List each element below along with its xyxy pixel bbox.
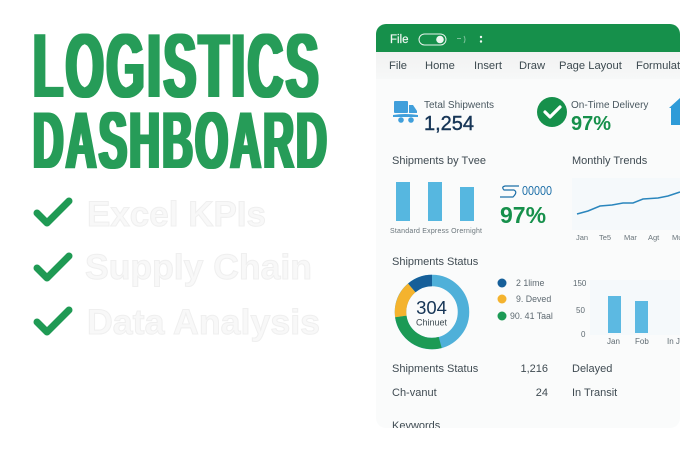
- menu tabs: Draw: [519, 60, 546, 72]
- chart: monthly trends: Monthly Trends: [572, 155, 648, 167]
- KPI: 97 percent: [500, 185, 552, 223]
- KPI: total shipments: 1,254: [424, 113, 474, 135]
- menu tabs: Insert: [474, 60, 503, 72]
- legend: 2 1lime: [516, 278, 544, 288]
- chart: monthly trends: Jan: [576, 233, 588, 242]
- feature: Data Analysis: Data Analysis: [87, 303, 320, 342]
- green title bar: File: [390, 34, 409, 46]
- feature list: [37, 195, 320, 342]
- KPI: on-time delivery: On-Time Delivery: [571, 100, 648, 111]
- chart: monthly trends: [572, 155, 680, 242]
- chart: column chart: Jan: [607, 337, 620, 346]
- menu tabs: [376, 52, 680, 72]
- icon: check circle: [537, 97, 567, 127]
- KPI: on-time delivery: 97%: [571, 113, 611, 135]
- table: status rows: In Transit: [572, 387, 617, 399]
- title: logistics dashboard: [33, 16, 329, 186]
- chart: shipments status donut: 304: [416, 297, 447, 318]
- icon: warehouse: [669, 98, 680, 125]
- chart: monthly trends: Mar: [624, 233, 637, 242]
- legend: [498, 278, 553, 321]
- panel: spreadsheet dashboard: [376, 24, 680, 432]
- chart: shipments status donut: Shipments Status: [392, 256, 479, 268]
- table: status rows: Ch-vanut: [392, 387, 437, 399]
- KPI: 97 percent: 00000: [522, 183, 552, 198]
- green title bar: [376, 24, 680, 52]
- chart: column chart: 150: [573, 279, 587, 288]
- title line: LOGISTICS: LOGISTICS: [33, 16, 321, 117]
- icon: truck: [393, 101, 418, 123]
- chart: column chart: [573, 279, 680, 346]
- chart: monthly trends: Te5: [599, 233, 611, 242]
- feature: Excel KPIs: Excel KPIs: [87, 195, 266, 234]
- chart: column chart: In J: [667, 337, 680, 346]
- chart: shipments by type: Shipments by Tvee: [392, 155, 486, 167]
- table: status rows: 24: [536, 387, 548, 399]
- chart: monthly trends: Agt: [648, 233, 660, 242]
- KPI: on-time delivery: [537, 97, 648, 130]
- title line: DASHBOARD: DASHBOARD: [33, 95, 329, 186]
- chart: column chart: 50: [576, 306, 585, 315]
- KPI: total shipments: [393, 100, 494, 135]
- KPI: total shipments: Tetal Shipwents: [424, 100, 494, 111]
- chart: shipments status donut: Chinuet: [416, 318, 448, 328]
- keywords label: Kevwords: [392, 420, 441, 432]
- chart: column chart: 0: [581, 330, 586, 339]
- KPI: 97 percent: 97%: [500, 202, 546, 228]
- table: status rows: Delayed: [572, 363, 612, 375]
- menu tabs: Home: [425, 60, 455, 72]
- menu tabs: Formulat: [636, 60, 680, 72]
- chart: shipments by type: [390, 155, 486, 235]
- legend: 90. 41 Taal: [510, 311, 553, 321]
- menu tabs: File: [389, 60, 407, 72]
- feature: Supply Chain: Supply Chain: [85, 248, 312, 287]
- menu tabs: Page Layout: [559, 60, 623, 72]
- table: status rows: [392, 364, 618, 396]
- chart: shipments by type: Standard Express Orernight: [390, 228, 482, 235]
- chart: shipments status donut: [392, 256, 479, 344]
- chart: column chart: Fob: [635, 337, 649, 346]
- table: status rows: Shipments Status: [392, 363, 479, 375]
- legend: 9. Deved: [516, 294, 551, 304]
- table: status rows: 1,216: [520, 363, 548, 375]
